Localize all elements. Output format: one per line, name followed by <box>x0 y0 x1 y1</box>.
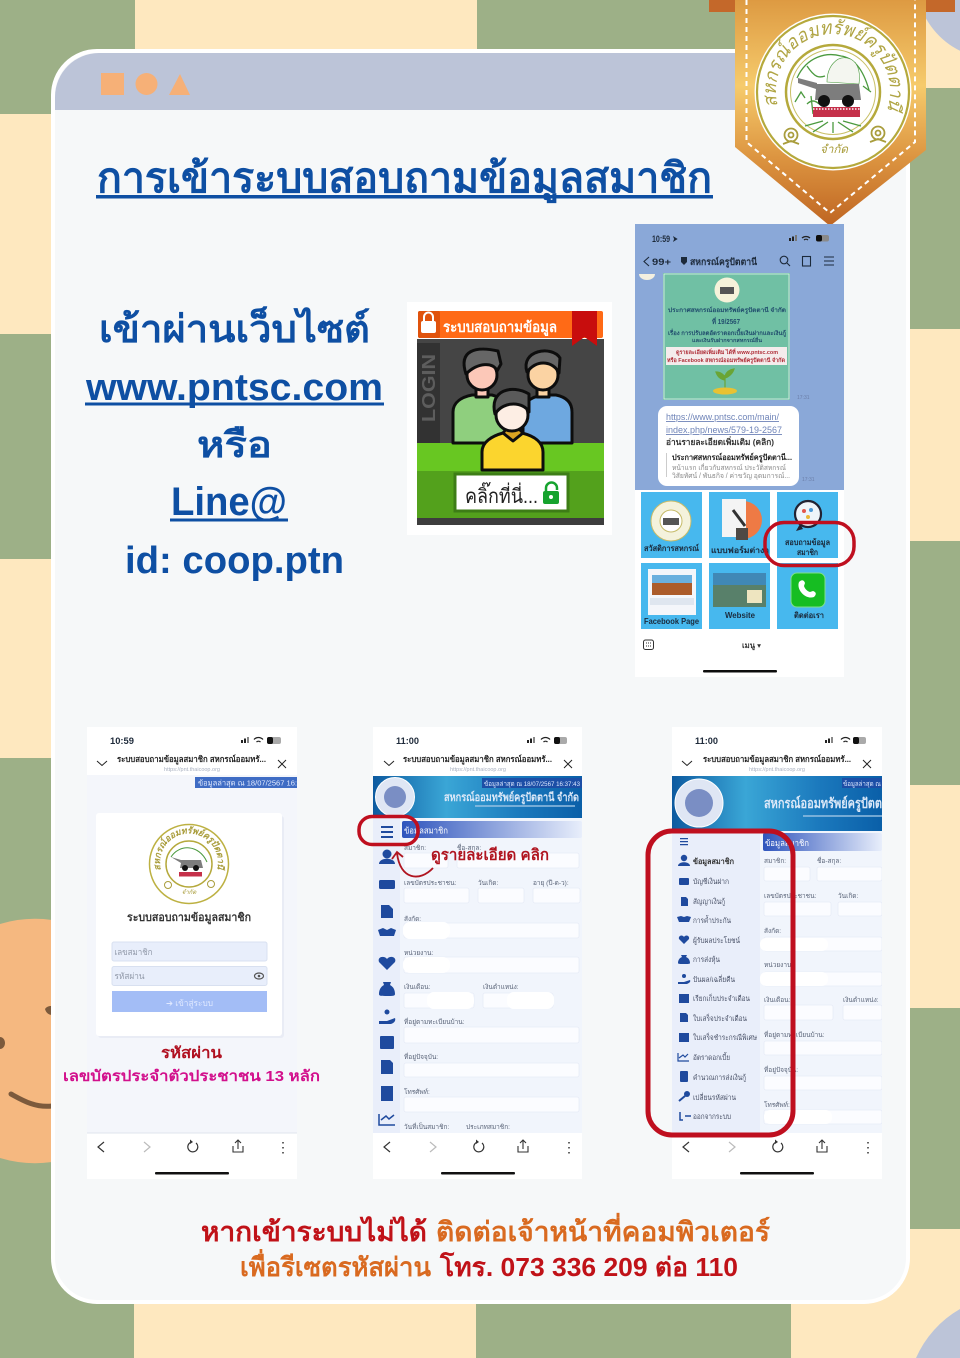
footer contact note: โทร. 073 336 209 ต่อ 110 <box>439 1251 738 1282</box>
login card <box>96 813 284 1038</box>
text block: how to access: www.pntsc.com <box>85 367 383 409</box>
browser title <box>682 754 871 773</box>
status bar: 10:59 <box>110 736 134 747</box>
member form: อายุ (ปี-ด-ว): <box>533 879 569 887</box>
red highlight: member inquiry tile <box>765 522 854 566</box>
browser title: https://pnt.thaicoop.org <box>450 767 506 773</box>
menu labels: เปลี่ยนรหัสผ่าน <box>693 1092 736 1102</box>
tile: website: Website <box>725 611 756 620</box>
site banner <box>672 776 882 831</box>
announcement card: หรือ Facebook สหกรณ์ออมทรัพย์ครูปัตตานี จำกัด <box>667 356 785 365</box>
menu labels: อัตราดอกเบี้ย <box>693 1052 730 1062</box>
back band of the ribbon <box>709 0 955 12</box>
menu labels: ข้อมูลสมาชิก <box>693 857 734 867</box>
member form: วันเกิด: <box>478 879 498 887</box>
lock icon <box>421 312 436 333</box>
phone screenshot 2: member data <box>373 727 582 1133</box>
browser title: ระบบสอบถามข้อมูลสมาชิก สหกรณ์ออมทรั... <box>703 754 851 765</box>
chat header: สหกรณ์ครูปัตตานี <box>690 256 757 269</box>
footer contact note: ติดต่อเจ้าหน้าที่คอมพิวเตอร์ <box>436 1212 771 1247</box>
member form: ที่อยู่ตามทะเบียนบ้าน: <box>404 1017 465 1026</box>
tile: contact phone: ติดต่อเรา <box>794 611 824 620</box>
member form: โทรศัพท์: <box>764 1101 790 1109</box>
link bubble: https://www.pntsc.com/main/ <box>666 412 779 422</box>
login banner image: คลิ๊กที่นี่... <box>465 481 538 508</box>
link bubble: index.php/news/579-19-2567 <box>666 425 782 435</box>
login card: ระบบสอบถามข้อมูลสมาชิก <box>127 911 251 925</box>
member form <box>760 856 882 1124</box>
menu labels: สัญญาเงินกู้ <box>693 897 725 906</box>
site banner: สหกรณ์ออมทรัพย์ครูปัตต <box>764 795 882 812</box>
password input <box>112 966 267 986</box>
rich menu tiles <box>641 492 838 629</box>
login button <box>112 991 267 1012</box>
ribbon badge <box>735 0 926 226</box>
login banner image <box>407 302 612 535</box>
callout: view details, click: ดูรายละเอียด คลิก <box>431 846 549 866</box>
member form: ชื่อ-สกุล: <box>457 843 481 852</box>
callout: view details, click <box>392 846 549 877</box>
tile: welfare: สวัสดิการสหกรณ์ <box>644 543 700 553</box>
sidebar with icons <box>378 826 396 1126</box>
small logo: สหกรณ์ออมทรัพย์ครูปัตตานี <box>154 826 226 871</box>
click here button <box>455 474 568 511</box>
member form: เงินตำแหน่ง: <box>843 996 879 1004</box>
small logo: จำกัด <box>182 889 197 896</box>
menu labels: การส่งหุ้น <box>693 955 720 964</box>
member form: หน่วยงาน: <box>764 962 793 969</box>
note: password is 13-digit ID <box>63 1045 320 1085</box>
menu labels <box>693 857 757 1121</box>
announcement card: ดูรายละเอียดเพิ่มเติม ได้ที่ www.pntsc.com <box>676 348 778 357</box>
avatar <box>639 274 655 280</box>
footer contact note: เพื่อรีเซตรหัสผ่าน <box>240 1248 431 1282</box>
section header: ข้อมูลสมาชิก <box>765 838 809 849</box>
red highlight: hamburger menu <box>359 816 418 844</box>
menu labels: การค้ำประกัน <box>693 915 731 925</box>
member form: โทรศัพท์: <box>404 1088 430 1096</box>
site banner: สหกรณ์ออมทรัพย์ครูปัตตานี จำกัด <box>444 790 579 805</box>
member form: หน่วยงาน: <box>404 950 433 957</box>
chat header <box>644 256 834 269</box>
phone screenshot 1: login <box>87 727 297 1179</box>
member form: เลขบัตรประชาชน: <box>404 879 457 887</box>
logo: cooperative seal: จำกัด <box>820 143 849 156</box>
bottom menu bar <box>644 640 777 672</box>
menu labels: ผู้รับผลประโยชน์ <box>693 936 740 945</box>
red highlight: side menu <box>648 831 793 1135</box>
tile: facebook page <box>644 569 700 626</box>
site banner: ข้อมูลล่าสุด ณ 18/07/2567 16:37:43 <box>484 780 580 788</box>
tile: forms <box>711 499 769 555</box>
announcement card: 17:31 <box>797 395 810 401</box>
member form: วันที่เป็นสมาชิก: <box>404 1122 449 1131</box>
link bubble <box>658 406 815 486</box>
section header: ข้อมูลสมาชิก <box>404 826 448 836</box>
update tag: ข้อมูลล่าสุด ณ 18/07/2567 16: <box>198 778 297 788</box>
login vertical label: LOGIN <box>419 354 439 422</box>
menu labels: บัญชีเงินฝาก <box>693 877 729 886</box>
status bar <box>652 234 829 245</box>
tile: contact phone <box>791 573 825 620</box>
bottom menu bar: เมนู ▾ <box>742 641 761 651</box>
sidebar menu <box>677 838 757 1121</box>
logo: cooperative seal <box>754 14 912 170</box>
member form: สังกัด: <box>764 927 781 935</box>
link bubble: อ่านรายละเอียดเพิ่มเติม (คลิก) <box>666 435 774 447</box>
redacted field values <box>403 922 554 1009</box>
text block: how to access: หรือ <box>197 424 272 465</box>
small logo <box>148 824 230 904</box>
login button: ➔ เข้าสู่ระบบ <box>166 998 213 1009</box>
link bubble: หน้าแรก เกี่ยวกับสหกรณ์ ประวัติสหกรณ์ <box>672 463 786 472</box>
note: password is 13-digit ID: เลขบัตรประจำตัวประชาชน 13 หลัก <box>63 1068 320 1085</box>
member form: เลขบัตรประชาชน: <box>764 892 817 900</box>
tile: facebook page: Facebook Page <box>644 617 700 626</box>
toolbar of phone 2 <box>373 1133 582 1179</box>
people illustration <box>453 349 572 470</box>
title: การเข้าระบบสอบถามข้อมูลสมาชิก <box>97 155 712 204</box>
member form: ที่อยู่ตามทะเบียนบ้าน: <box>764 1030 825 1039</box>
tile: member inquiry: สอบถามข้อมูล <box>785 537 830 548</box>
menu labels: เรียกเก็บประจำเดือน <box>693 993 750 1003</box>
status bar: 11:00 <box>695 736 718 747</box>
header shapes: square circle triangle <box>101 73 190 95</box>
chat header: 99+ <box>652 257 672 268</box>
toolbar of phone 3 <box>672 1133 882 1179</box>
username input <box>112 942 267 961</box>
text block: how to access <box>85 306 384 582</box>
footer contact note <box>201 1212 771 1282</box>
member form: ที่อยู่ปัจจุบัน: <box>764 1065 798 1074</box>
menu labels: คำนวณการส่งเงินกู้ <box>693 1073 746 1082</box>
cannon <box>798 78 861 100</box>
site banner: ข้อมูลล่าสุด ณ <box>843 780 881 788</box>
browser title: ระบบสอบถามข้อมูลสมาชิก สหกรณ์ออมทรั... <box>403 754 552 765</box>
browser title <box>384 754 572 773</box>
link bubble: วิสัยทัศน์ / พันธกิจ / ค่าขวัญ อุดมการณ์... <box>672 472 790 480</box>
member form: ชื่อ-สกุล: <box>817 856 841 865</box>
logo: cooperative seal: สหกรณ์ออมทรัพย์ครูปัตตานี <box>764 19 903 114</box>
member form: วันเกิด: <box>838 892 858 900</box>
member form: ที่อยู่ปัจจุบัน: <box>404 1052 438 1061</box>
member form: สมาชิก: <box>404 844 426 852</box>
member form: เงินตำแหน่ง: <box>483 983 519 991</box>
footer contact note: หากเข้าระบบไม่ได้ <box>201 1216 427 1247</box>
card header bar <box>55 53 906 110</box>
login banner image: ระบบสอบถามข้อมูล <box>443 319 557 336</box>
mountain and palm scene <box>795 55 871 133</box>
site banner <box>373 776 582 818</box>
status bar <box>396 736 567 744</box>
member form: เงินเดือน: <box>404 983 431 991</box>
menu labels: ใบเสร็จชำระกรณีพิเศษ <box>693 1032 757 1042</box>
member form: เงินเดือน: <box>764 996 791 1004</box>
username input: เลขสมาชิก <box>114 947 152 957</box>
status bar: 11:00 <box>396 736 419 747</box>
browser title: https://pnt.thaicoop.org <box>164 767 220 773</box>
announcement card: ประกาศสหกรณ์ออมทรัพย์ครูปัตตานี จำกัด <box>668 306 786 315</box>
LINE chat screenshot <box>635 224 844 677</box>
menu labels: ออกจากระบบ <box>693 1112 731 1121</box>
announcement card: เรื่อง การปรับลดอัตราดอกเบี้ยเงินฝากและเงินกู้ <box>668 327 786 338</box>
link bubble: ประกาศสหกรณ์ออมทรัพย์ครูปัตตานี... <box>672 452 792 463</box>
tile: member inquiry <box>785 501 830 557</box>
announcement card <box>663 273 810 401</box>
announcement card: และเงินรับฝากจากสหกรณ์อื่น <box>692 336 763 344</box>
section header <box>402 821 582 838</box>
password input: รหัสผ่าน <box>114 971 145 981</box>
browser toolbar <box>87 1133 297 1179</box>
browser title <box>97 754 286 773</box>
tile: website <box>713 573 766 620</box>
menu labels: ใบเสร็จประจำเดือน <box>693 1013 747 1023</box>
tile: member inquiry: สมาชิก <box>797 548 818 557</box>
note: password is 13-digit ID: รหัสผ่าน <box>161 1045 222 1062</box>
member form <box>403 843 580 1131</box>
tile: welfare <box>644 501 700 553</box>
member form: ประเภทสมาชิก: <box>466 1123 510 1131</box>
text block: how to access: Line@ <box>171 480 287 524</box>
curved arrow <box>392 852 433 877</box>
text block: how to access: id: coop.ptn <box>125 540 344 582</box>
text block: how to access: เข้าผ่านเว็บไซต์ <box>99 306 370 351</box>
announcement card: ที่ 19/2567 <box>712 316 740 326</box>
tile: forms: แบบฟอร์มต่างๆ <box>711 545 769 555</box>
menu labels: ปันผล/เฉลี่ยคืน <box>693 974 735 984</box>
browser title: ระบบสอบถามข้อมูลสมาชิก สหกรณ์ออมทรั... <box>117 754 266 765</box>
smiling orange circle decoration <box>0 919 52 1163</box>
member form: สมาชิก: <box>764 857 786 865</box>
small medallions <box>783 126 886 144</box>
red bookmark <box>572 311 597 346</box>
phone screenshot 3: side menu <box>672 727 882 1133</box>
section header <box>763 833 882 851</box>
status bar <box>696 736 866 744</box>
redacted field values <box>760 938 832 1124</box>
status bar: 10:59 ➤ <box>652 234 678 245</box>
member form: สังกัด: <box>404 915 421 923</box>
browser title: https://pnt.thaicoop.org <box>749 767 805 773</box>
status bar <box>110 736 281 744</box>
link bubble: 17:31 <box>802 477 815 483</box>
